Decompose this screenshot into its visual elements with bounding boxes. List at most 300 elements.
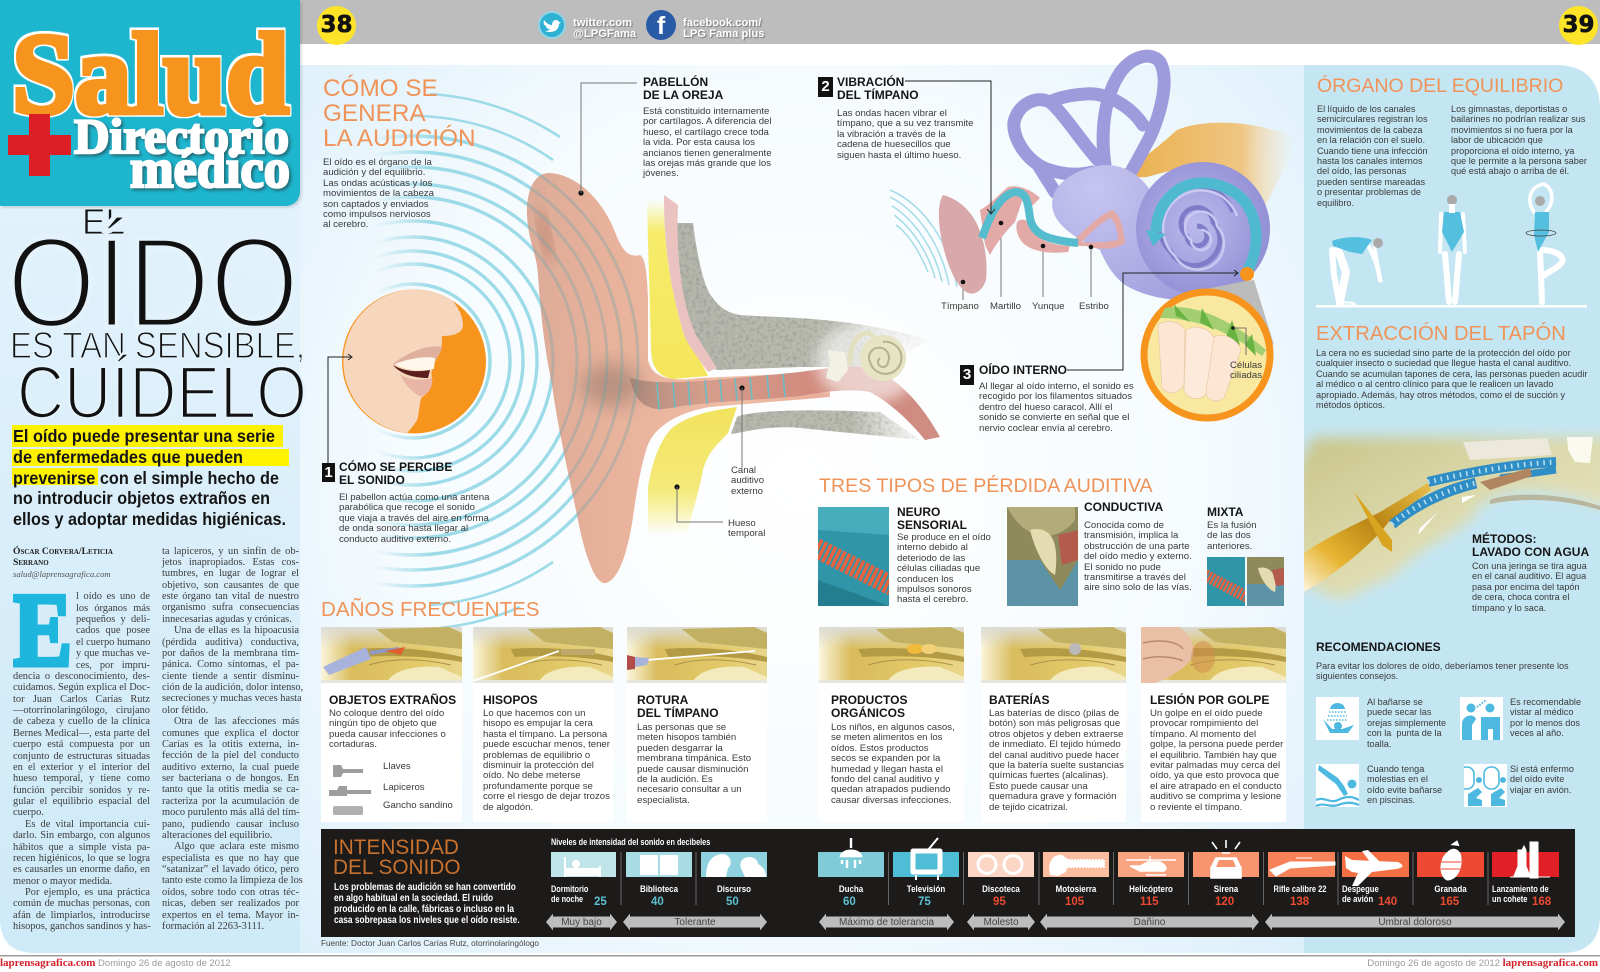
nerve fibres <box>1113 123 1296 212</box>
facebook handle: LPG Fama plus <box>683 28 764 40</box>
step 2 text: siguen hasta el último hueso. <box>837 150 961 161</box>
social: facebook <box>646 10 766 41</box>
waves over ear <box>527 174 640 517</box>
lanzamiento label: un cohete <box>1492 893 1527 904</box>
pabellón text: las orejas más grande que los <box>643 158 771 169</box>
neuro text: hasta el cerebro. <box>897 594 968 605</box>
article column 2: moco purulento más allá del tím- <box>162 807 300 818</box>
card text: botón) son más peligrosas que <box>989 718 1120 729</box>
range arrow: máximo de tolerancia <box>819 914 954 930</box>
top grey header bar <box>300 0 1600 44</box>
neuro text: impulsos sonoros <box>897 584 972 595</box>
byline: Serrano <box>13 557 49 568</box>
article column 1: Por ejemplo, es una práctica <box>25 887 150 898</box>
heading: cómo se genera la audición: LA AUDICIÓN <box>323 125 476 152</box>
step 1 text: parabólica que recoge el sonido <box>339 502 475 513</box>
pabellón text: la vida. Por esta causa los <box>643 137 755 148</box>
intro text: movimientos de la cabeza <box>323 188 434 199</box>
highlighted deck <box>12 425 289 529</box>
neuro text: deteriodo de las <box>897 553 965 564</box>
icon: shower towel <box>1316 697 1359 740</box>
value 168: 168 <box>1532 896 1551 908</box>
card image: fist <box>1141 627 1286 683</box>
equilibrium text right: Los gimnastas, deportistas o <box>1451 104 1567 114</box>
upper muscle strip <box>664 195 717 372</box>
intensity text: casa sobrepasa los niveles que el oído resiste. <box>334 914 520 926</box>
card text: que la batería suelte sustancias <box>989 760 1124 771</box>
equilibrium text left: movimientos de la cabeza <box>1317 125 1422 135</box>
article column 1: l oído es uno de <box>76 591 150 602</box>
step 2 text: Las ondas hacen vibrar el <box>837 108 947 119</box>
article column 2: olor fétido. <box>162 705 208 716</box>
article column 2: tumbres, en lugar de lograr el <box>162 568 299 579</box>
conductiva text: del oído medio y externo. <box>1084 551 1192 562</box>
card text <box>1150 709 1283 813</box>
neuro image <box>816 507 892 606</box>
pabellón text: por cartílagos. A diferencia del <box>643 116 772 127</box>
article column 2: alteraciones del equilibrio. <box>162 830 273 841</box>
card title: ROTURA <box>637 693 688 707</box>
methods text: de cera, choca contra el <box>1472 592 1569 602</box>
range arrow: dañino: Dañino <box>1134 916 1165 928</box>
card title: ORGÁNICOS <box>831 706 905 720</box>
waves toward eardrum <box>890 190 957 287</box>
card text: oído, ya que esto provoca que <box>1150 770 1279 781</box>
article column 1: el cuerpo humano <box>76 637 150 648</box>
methods text: en el canal auditivo. El agua <box>1472 571 1586 581</box>
intro text: al cerebro. <box>323 219 368 230</box>
mixta text: Es la fusión <box>1207 520 1257 531</box>
label estribo: Estribo <box>1079 301 1109 312</box>
intensity text: en algo habitual en la sociedad. El ruido <box>334 892 493 904</box>
card image: cotton tip cone <box>321 627 462 683</box>
equilibrium text right <box>1451 104 1587 177</box>
pabellón text: hueso, el cartílago crece toda <box>643 127 769 138</box>
card text: el equilibrio. También hay que <box>1150 750 1277 761</box>
mixta text: anteriores. <box>1207 541 1252 552</box>
range arrow: muy bajo <box>546 914 617 930</box>
page number 38 <box>317 6 356 45</box>
footer rule <box>0 955 1600 956</box>
article column 1: en el exterior y el interior del <box>13 762 150 773</box>
words: Directorio médico: médico <box>130 140 290 200</box>
face in orange circle <box>342 290 486 434</box>
methods title: MÉTODOS: <box>1472 532 1536 546</box>
card text: Esto puede causar una <box>989 781 1088 792</box>
highlighted deck: prevenirse con el simple hecho de <box>13 468 279 488</box>
dormitorio label: de noche <box>551 893 583 904</box>
recommendations intro: siguientes consejos. <box>1316 671 1398 681</box>
background: main page gradient panel <box>0 65 1330 953</box>
figure arms up with balance ring <box>1530 184 1563 302</box>
small middle-ear and cochlea <box>816 320 920 404</box>
ear wash illustration with syringe <box>1296 437 1600 600</box>
card text: químicas fuertes (alcalinas). <box>989 770 1108 781</box>
card text: puede causar disminución <box>637 764 748 775</box>
neuro text: Se produce en el oído <box>897 532 991 543</box>
mixta title: MIXTA <box>1207 505 1243 519</box>
tip text doctor <box>1510 697 1581 739</box>
card text: otros objetos y deben extraerse <box>989 729 1123 740</box>
value 138: 138 <box>1290 896 1309 908</box>
conductiva text <box>1084 520 1192 593</box>
article column 1: dencia o desconocimiento, des- <box>13 671 150 682</box>
step 1 text: de onda sonora hasta llegar al <box>339 523 468 534</box>
step 1 badge: 1 <box>324 464 333 481</box>
label canal auditivo externo: Canal <box>731 465 756 476</box>
card title: OBJETOS EXTRAÑOS <box>329 693 456 707</box>
heading: extracción del tapón: EXTRACCIÓN DEL TAPÓN <box>1316 323 1566 345</box>
label células ciliadas <box>1230 360 1262 381</box>
article column 1: cuerpo está compuesta por un <box>13 739 150 750</box>
card text: Lo que hacemos con un <box>483 708 585 719</box>
card text: se meten alimentos en los <box>831 732 942 743</box>
pabellón title: PABELLÓN <box>643 75 708 89</box>
step 3 text: recogido por los filamentos situados <box>979 391 1132 402</box>
card text: puede escuchar menos, tener <box>483 739 610 750</box>
byline: salud@laprensagrafica.com <box>13 569 111 579</box>
main title: El oído es tan sensible, cuídelo <box>7 206 307 422</box>
article column 1: los órganos más <box>76 603 150 614</box>
extraction text: al médico o al centro clínico para que le realicen un lavado <box>1316 379 1553 389</box>
motosierra label: Motosierra <box>1056 883 1096 894</box>
value 75: 75 <box>918 896 931 908</box>
intro text: como impulsos nerviosos <box>323 209 431 220</box>
article column 2: tanto que la otitis media se ca- <box>162 784 299 795</box>
tip text doctor: Es recomendable <box>1510 697 1581 707</box>
card image: swab <box>473 627 613 683</box>
footer left: laprensagrafica.com Domingo 26 de agosto de 2012 <box>0 957 231 969</box>
neuro text <box>897 532 991 605</box>
page number 38: 38 <box>320 12 352 38</box>
leader: step 2 <box>905 81 995 214</box>
article column 1: cados que posee <box>76 625 150 636</box>
social: twitter <box>538 11 638 40</box>
eardrum and ossicles <box>939 186 1125 294</box>
page number 39 <box>1559 6 1598 45</box>
helicoptero label: Helicóptero <box>1129 883 1173 894</box>
television label: Televisión <box>907 883 945 894</box>
card title <box>637 693 719 720</box>
card text: golpe, la persona puede perder <box>1150 739 1283 750</box>
mixta text <box>1207 520 1257 552</box>
equilibrium text left: del oído, las personas <box>1317 166 1406 176</box>
ground line <box>1316 305 1587 308</box>
label células ciliadas: ciliadas <box>1230 370 1262 381</box>
despegue label: de avión <box>1342 893 1373 904</box>
conductiva text: aire sino solo de las vías. <box>1084 582 1192 593</box>
equilibrium text left: en la relación con el suelo. <box>1317 135 1425 145</box>
card text: No coloque dentro del oído <box>329 708 444 719</box>
vestibule body <box>1052 165 1200 300</box>
tip text doctor: por lo menos dos <box>1510 718 1580 728</box>
card: lesión por golpe <box>1141 627 1286 822</box>
card text: de inmediato. El tejido húmedo <box>989 739 1121 750</box>
words: Directorio médico <box>74 109 290 200</box>
ear illustration: pinna, bone, canal <box>526 173 940 584</box>
card text <box>989 708 1124 813</box>
heading: cómo se genera la audición: CÓMO SE <box>323 75 438 102</box>
lower bone strip <box>731 410 920 440</box>
leader lines <box>581 83 1091 522</box>
byline: Óscar Corvera/Leticia <box>13 546 113 557</box>
article column 2: (pérdida auditiva) conductiva, <box>162 636 299 648</box>
tip text pool: en piscinas. <box>1367 795 1415 805</box>
recommendations intro <box>1316 661 1569 682</box>
equilibrium text right: bailarines no podrían realizar sus <box>1451 114 1585 124</box>
range arrow: tolerante <box>623 914 767 930</box>
card text: del canal auditivo puede hacer <box>989 750 1119 761</box>
card image: deep swab <box>627 627 767 683</box>
teal sound path on cochlea <box>1156 183 1256 277</box>
ear canal <box>630 367 940 440</box>
card title: LESIÓN POR GOLPE <box>1150 693 1269 707</box>
card text: corre el riesgo de dejar trozos <box>483 791 610 802</box>
intro text: son captados y enviados <box>323 199 429 210</box>
icon: diving <box>1316 764 1359 807</box>
card title: PRODUCTOS <box>831 693 907 707</box>
article column 2: “satanizar” el lavado ótico, pero <box>162 864 299 875</box>
article column 1: ces, por impru- <box>76 660 150 671</box>
word: Salud: Salud <box>12 12 289 139</box>
upper yellow cartilage <box>647 200 708 379</box>
card title: DEL TÍMPANO <box>637 706 719 720</box>
card text: hasta el tímpano. La persona <box>483 729 607 740</box>
highlighted deck: ellos y adoptar medidas higiénicas. <box>13 509 286 529</box>
card text <box>329 708 446 750</box>
label gancho sandino: Gancho sandino <box>383 800 453 811</box>
methods title <box>1472 533 1589 558</box>
card text: membrana timpánica. Esto <box>637 753 751 764</box>
range arrow: muy bajo: Muy bajo <box>561 916 602 928</box>
icon: twitter bird <box>538 11 566 39</box>
label yunque: Yunque <box>1032 301 1065 312</box>
equilibrium text left: equilibro. <box>1317 198 1354 208</box>
tip text shower: con la punta de la <box>1367 728 1442 738</box>
markers on ear <box>578 190 745 490</box>
neuro text: conducen los <box>897 574 954 585</box>
range arrow: máximo de tolerancia: Máximo de tolerancia <box>839 916 934 928</box>
article column 1: hisopos, ganchos sandinos y has- <box>13 921 151 932</box>
step 2 title <box>837 75 919 102</box>
article column 2: racteriza por la acumulación de <box>162 796 299 807</box>
article column 2: secreciones y muchas veces hasta <box>162 693 302 704</box>
step 1 badge <box>322 463 335 482</box>
discoteca label: Discoteca <box>982 883 1020 894</box>
neuro text: interno debido al <box>897 542 968 553</box>
hair cells detail circle <box>1144 292 1270 418</box>
card text: Las baterías de disco (pilas de <box>989 708 1119 719</box>
article column 2 <box>162 546 303 932</box>
extraction text <box>1316 348 1587 410</box>
card text: quemadura grave y formación <box>989 791 1116 802</box>
step 3 text: Al llegar al oído interno, el sonido es <box>979 381 1134 392</box>
intensity text: producido en la calle, fábricas o incluso en la <box>334 904 514 914</box>
label martillo: Martillo <box>990 301 1021 312</box>
step 3 text: sonido se convierte en señal que el <box>979 412 1129 423</box>
value 140: 140 <box>1378 896 1397 908</box>
label llaves: Llaves <box>383 761 411 772</box>
card text <box>831 722 955 806</box>
object icons <box>329 765 371 815</box>
card text: Los niños, en algunos casos, <box>831 722 955 733</box>
card text: o reviente el tímpano. <box>1150 802 1242 813</box>
conductiva text: transmitirse a través del <box>1084 572 1186 583</box>
inner ear: semicircular canals and cochlea <box>1014 56 1296 300</box>
value 120: 120 <box>1215 896 1234 908</box>
extraction text: La cera no es suciedad sino parte de la protección del oído por <box>1316 348 1571 358</box>
dormitorio label <box>551 884 588 904</box>
intro text: El oído es el órgano de la <box>323 157 432 168</box>
article column 2: Otra de las afecciones más <box>174 716 299 727</box>
article column 1: menor o mayor medida. <box>13 876 112 887</box>
article column 1: tor Juan Carlos Carías Rutz <box>13 694 150 705</box>
label células ciliadas: Células <box>1230 360 1262 371</box>
recommendations intro: Para evitar los dolores de oído, deberíamos tener presente los <box>1316 661 1569 671</box>
article column 1: pequeños y deli- <box>76 614 150 625</box>
label canal auditivo externo <box>731 465 764 497</box>
upper spongy bone <box>677 223 930 370</box>
equilibrium text left: pueden sentirse mareadas <box>1317 177 1425 187</box>
step 1 text: conducto auditivo externo. <box>339 534 451 545</box>
card: hisopos <box>473 627 613 822</box>
article column 1: recen higiénicos, lo que se logra <box>13 853 150 864</box>
highlighted deck: El oído puede presentar una serie <box>13 426 275 446</box>
step 2 badge: 2 <box>821 78 830 95</box>
card text: el aire atrapado en el conducto <box>1150 781 1282 792</box>
conductiva text: Conocida como de <box>1084 520 1164 531</box>
mixta text: de las dos <box>1207 530 1251 541</box>
tip text plane: del oído evite <box>1510 774 1564 784</box>
label tímpano: Tímpano <box>941 301 979 312</box>
article column 2: especialista es que no hay que <box>162 853 299 864</box>
decibel labels and values <box>540 880 1575 910</box>
article column 2: Carías es la otitis externa, in- <box>162 739 299 750</box>
article column 1 <box>12 591 151 932</box>
step 3 text <box>979 381 1134 434</box>
article column 2: comunes que explica el doctor <box>162 728 299 738</box>
pinna skin <box>527 173 830 583</box>
card text: fondo del canal auditivo y <box>831 774 939 785</box>
heading: daños frecuentes: DAÑOS FRECUENTES <box>321 598 540 621</box>
tip text shower: toalla. <box>1367 739 1391 749</box>
equilibrium text left <box>1317 104 1428 208</box>
article column 2: nicas, deben ser realizados por <box>162 898 299 909</box>
article column 2: pano, pudiendo causar incluso <box>162 818 299 830</box>
extraction text: métodos ópticos. <box>1316 400 1385 410</box>
equilibrium text left: semicirculares registran los <box>1317 114 1428 124</box>
byline <box>13 546 113 579</box>
value 50: 50 <box>726 896 739 908</box>
article column 2: este órgano tan vital de nuestro <box>162 591 299 602</box>
article column 1: Es de vital importancia cui- <box>25 819 150 830</box>
card text: humedad y llegan hasta el <box>831 764 943 775</box>
rifle label: Rifle calibre 22 <box>1274 883 1326 894</box>
panel: right blue column <box>1304 65 1600 953</box>
lanzamiento label <box>1492 884 1549 904</box>
intensity text: Los problemas de audición se han convertido <box>334 882 516 892</box>
heading: intensidad del sonido: DEL SONIDO <box>333 856 461 879</box>
step 1 title: CÓMO SE PERCIBE <box>339 460 452 474</box>
icon: doctor visit <box>1460 697 1503 740</box>
tip text pool: Cuando tenga <box>1367 764 1424 774</box>
icon: facebook f: f <box>657 12 665 40</box>
figure standing <box>1440 214 1465 302</box>
intro text: audición y del equilibrio. <box>323 167 425 178</box>
words: Directorio médico: Directorio <box>74 109 289 164</box>
article column 2: ta lapiceros, y un sinfín de ob- <box>162 546 299 556</box>
card text: quedan atrapados pudiendo <box>831 784 950 795</box>
article column 1: hábitos que a simple vista pa- <box>13 842 150 853</box>
pabellón title <box>643 75 723 102</box>
methods title: LAVADO CON AGUA <box>1472 545 1589 559</box>
step 3 badge: 3 <box>963 366 971 383</box>
step 1 text: El pabellon actúa como una antena <box>339 492 489 503</box>
tip text pool: molestias en el <box>1367 774 1428 784</box>
step 2 text: tímpano, que a su vez transmite <box>837 118 974 129</box>
extraction text: apropiado. Además, hay otros métodos, como el de succión y <box>1316 390 1565 400</box>
facebook handle <box>683 17 766 41</box>
card title <box>831 693 907 720</box>
card text: hisopo es empujar la cera <box>483 718 593 729</box>
label canal auditivo externo: externo <box>731 486 763 497</box>
article column 1: darlo. Sin embargo, con algunos <box>13 830 150 841</box>
decibel icon tiles <box>551 838 1559 886</box>
neuro title <box>897 505 967 532</box>
intro text: Las ondas acústicas y los <box>323 178 432 189</box>
step 3 title: OÍDO INTERNO <box>979 363 1067 377</box>
article column 1: —otorrinolaringólogo, cirujano <box>13 705 150 716</box>
card text: Las personas que se <box>637 722 726 733</box>
step 2 title: VIBRACIÓN <box>837 75 904 89</box>
equilibrium text left: o presentar problemas de <box>1317 187 1421 197</box>
extraction text: Cuando se acumulan tapones de cera, las personas pueden acudir <box>1316 369 1587 379</box>
despegue label <box>1342 884 1379 904</box>
conductiva text: transmisión, implica la <box>1084 530 1178 541</box>
article column 2: tanto este como la limpieza de los <box>162 875 303 886</box>
article column 1: y que muchas ve- <box>76 648 150 659</box>
range arrow: tolerante: Tolerante <box>674 916 716 928</box>
article column 2: ción de la audición, dolor intenso, <box>162 682 303 693</box>
article column 2: pánica. Como síntomas, el pa- <box>162 659 299 670</box>
step 1 title: EL SONIDO <box>339 473 405 487</box>
card text: de la audición. Es <box>637 774 713 785</box>
highlighted deck: no introducir objetos extraños en <box>13 488 270 508</box>
step 3 badge <box>960 365 974 385</box>
equilibrium text right: movimientos si no fuera por la <box>1451 125 1573 135</box>
article column 2: innecesarias agudas y crónicas. <box>162 614 292 625</box>
tile separators <box>621 852 1488 905</box>
heading: cómo se genera la audición: GENERA <box>323 100 426 127</box>
figure bending <box>1332 243 1381 306</box>
label hueso temporal: Hueso <box>728 518 756 529</box>
heading: tres tipos de pérdida auditiva: TRES TIPOS DE PÉRDIDA AUDITIVA <box>819 475 1153 497</box>
article column 1: cuerpo. <box>13 807 44 818</box>
tip text shower <box>1367 697 1446 749</box>
equilibrium text right: proporciona el oído interno, ya <box>1451 146 1574 156</box>
methods text: tímpano y lo saca. <box>1472 603 1546 613</box>
cochlea spiral <box>1136 162 1270 296</box>
highlighted deck: de enfermedades que pueden <box>13 447 243 467</box>
value 165: 165 <box>1440 896 1459 908</box>
card: baterías <box>981 627 1126 822</box>
masthead: Salud + Directorio médico <box>0 0 300 206</box>
tip text plane <box>1510 764 1574 795</box>
article column 2: formación al 2263-3111. <box>162 921 264 932</box>
step 1 text <box>339 492 490 545</box>
equilibrium text left: Cuando tiene una infección <box>1317 146 1428 156</box>
lower yellow cartilage <box>648 407 737 535</box>
